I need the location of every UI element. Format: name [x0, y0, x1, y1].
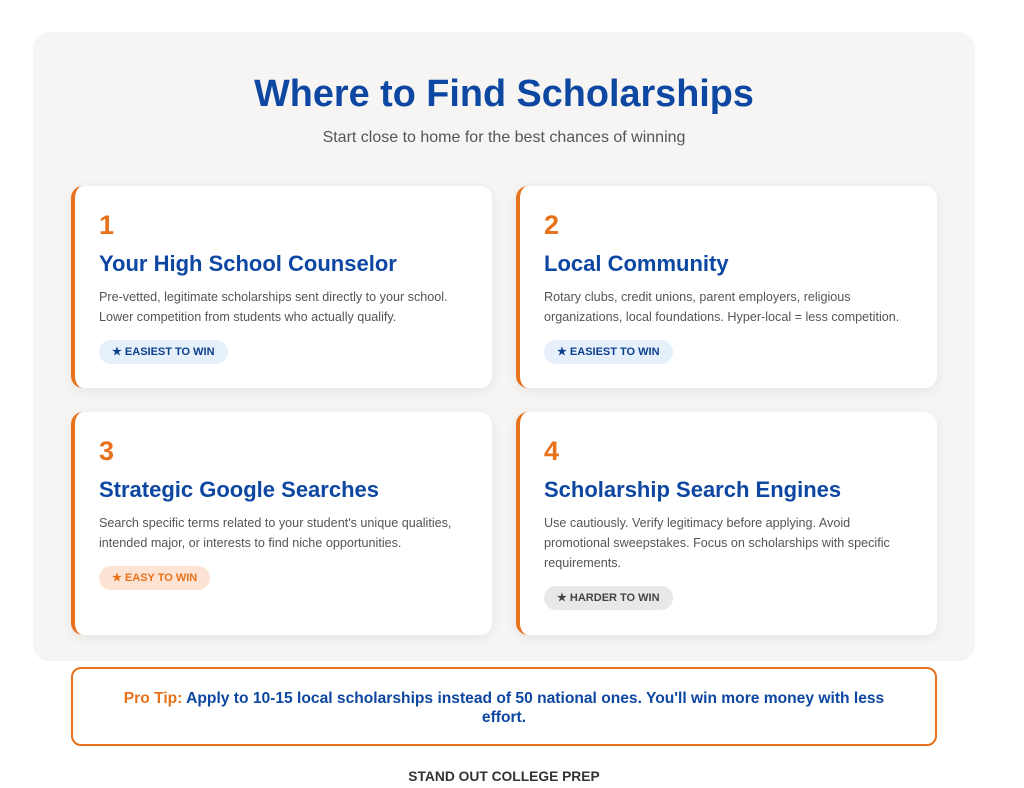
- badge 2: ★ EASIEST TO WIN: [557, 346, 660, 358]
- panel: card 3: [71, 412, 492, 635]
- badge 3: [99, 566, 210, 590]
- panel: card 1: [71, 186, 492, 388]
- panel: card 4: [516, 412, 937, 635]
- background panel: [33, 32, 975, 661]
- heading 4: Scholarship Search Engines: [544, 477, 841, 502]
- badge 2: [544, 340, 673, 364]
- heading 1: Your High School Counselor: [99, 251, 397, 276]
- badge 1: ★ EASIEST TO WIN: [112, 346, 215, 358]
- callout: pro tip: [71, 667, 937, 746]
- text 2: Rotary clubs, credit unions, parent employers, religious organizations, local foundations. Hyper-local = less competition.: [544, 290, 899, 324]
- number 4: 4: [544, 436, 559, 466]
- badge 4: [544, 586, 673, 610]
- number 2: 2: [544, 210, 559, 240]
- text 1: Pre-vetted, legitimate scholarships sent directly to your school. Lower competition from students who actually qualify.: [99, 290, 448, 324]
- text 4: Use cautiously. Verify legitimacy before applying. Avoid promotional sweepstakes. Focus on scholarships with specific requirements.: [544, 516, 890, 570]
- title: Where to Find Scholarships: [254, 73, 754, 115]
- heading 3: Strategic Google Searches: [99, 477, 379, 502]
- heading 2: Local Community: [544, 251, 729, 276]
- badge 4: ★ HARDER TO WIN: [557, 592, 660, 604]
- badge 1: [99, 340, 228, 364]
- number 1: 1: [99, 210, 114, 240]
- callout: pro tip: Pro Tip: Apply to 10-15 local scholarships instead of 50 national ones. You'll win more money with less effort.: [124, 690, 884, 726]
- badge 3: ★ EASY TO WIN: [112, 572, 197, 584]
- footer: STAND OUT COLLEGE PREP: [408, 769, 600, 784]
- subtitle: Start close to home for the best chances of winning: [323, 129, 685, 146]
- number 3: 3: [99, 436, 114, 466]
- text 3: Search specific terms related to your student's unique qualities, intended major, or interests to find niche opportunities.: [99, 516, 451, 550]
- panel: card 2: [516, 186, 937, 388]
